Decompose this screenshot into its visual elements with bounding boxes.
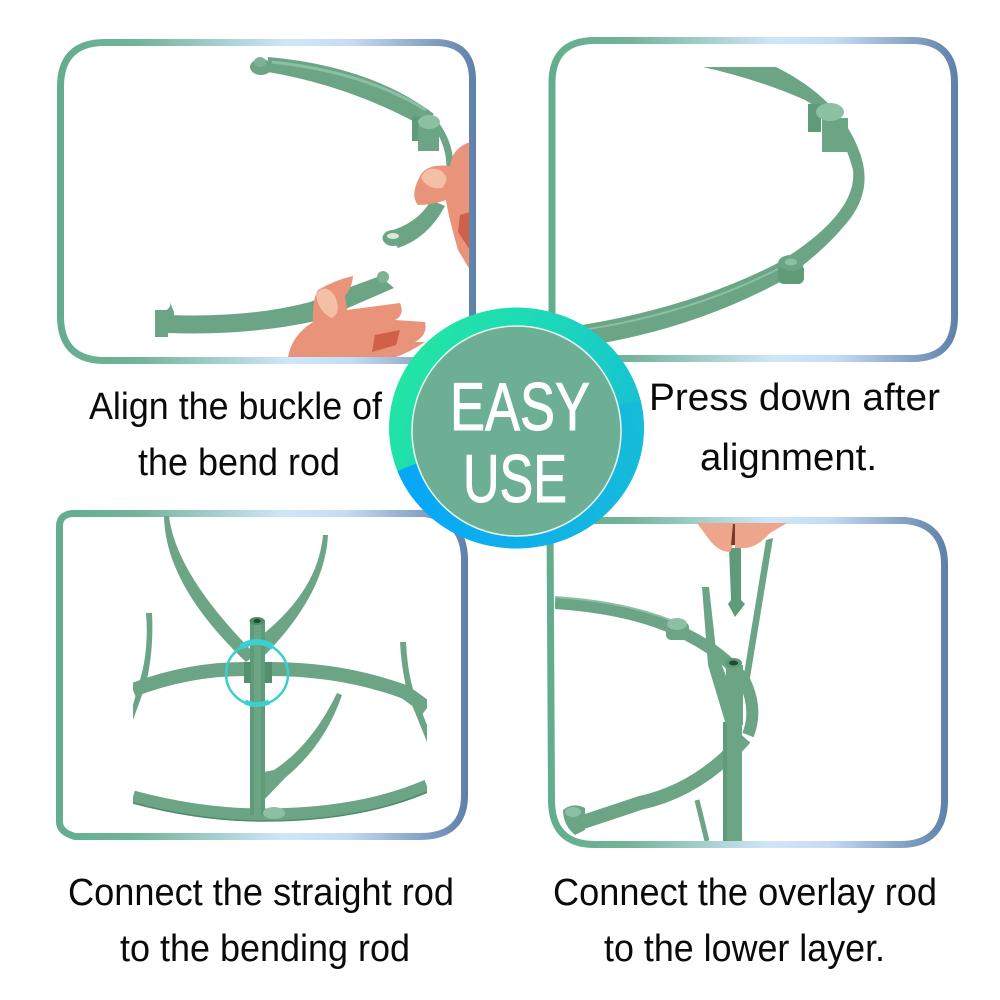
caption: step 1: the bend rod xyxy=(138,442,340,484)
caption: step 2: alignment. xyxy=(700,437,877,479)
caption: step 2: Press down after xyxy=(649,377,940,419)
panel frame 3 xyxy=(60,514,464,836)
panel frame 2 xyxy=(552,40,954,358)
caption: step 4 xyxy=(553,872,937,970)
panel frame 1 xyxy=(60,42,472,360)
caption: step 1 xyxy=(89,386,382,484)
caption: step 3: Connect the straight rod xyxy=(68,872,454,914)
caption: step 1: Align the buckle of xyxy=(89,386,382,428)
panel: connect straight rod xyxy=(60,514,464,836)
photo: assembled bend rod xyxy=(576,67,865,346)
photo: straight rod with highlight xyxy=(133,516,427,821)
caption: step 3 xyxy=(68,872,454,970)
badge text: USE xyxy=(463,441,567,517)
caption: step 3: to the bending rod xyxy=(120,928,410,970)
caption: step 4: to the lower layer. xyxy=(604,928,885,970)
photo: overlay rod and fingers xyxy=(555,523,787,842)
badge text xyxy=(450,369,590,517)
panel: press down xyxy=(552,40,954,358)
badge: easy use xyxy=(389,308,644,548)
badge text: EASY xyxy=(450,369,590,445)
caption: step 2 xyxy=(649,377,940,479)
panel: align the buckle xyxy=(60,42,472,360)
photo: bend rods and hands xyxy=(155,57,470,357)
panel frame 4 xyxy=(550,520,944,844)
caption: step 4: Connect the overlay rod xyxy=(553,872,937,914)
panel: connect overlay rod xyxy=(550,520,944,844)
